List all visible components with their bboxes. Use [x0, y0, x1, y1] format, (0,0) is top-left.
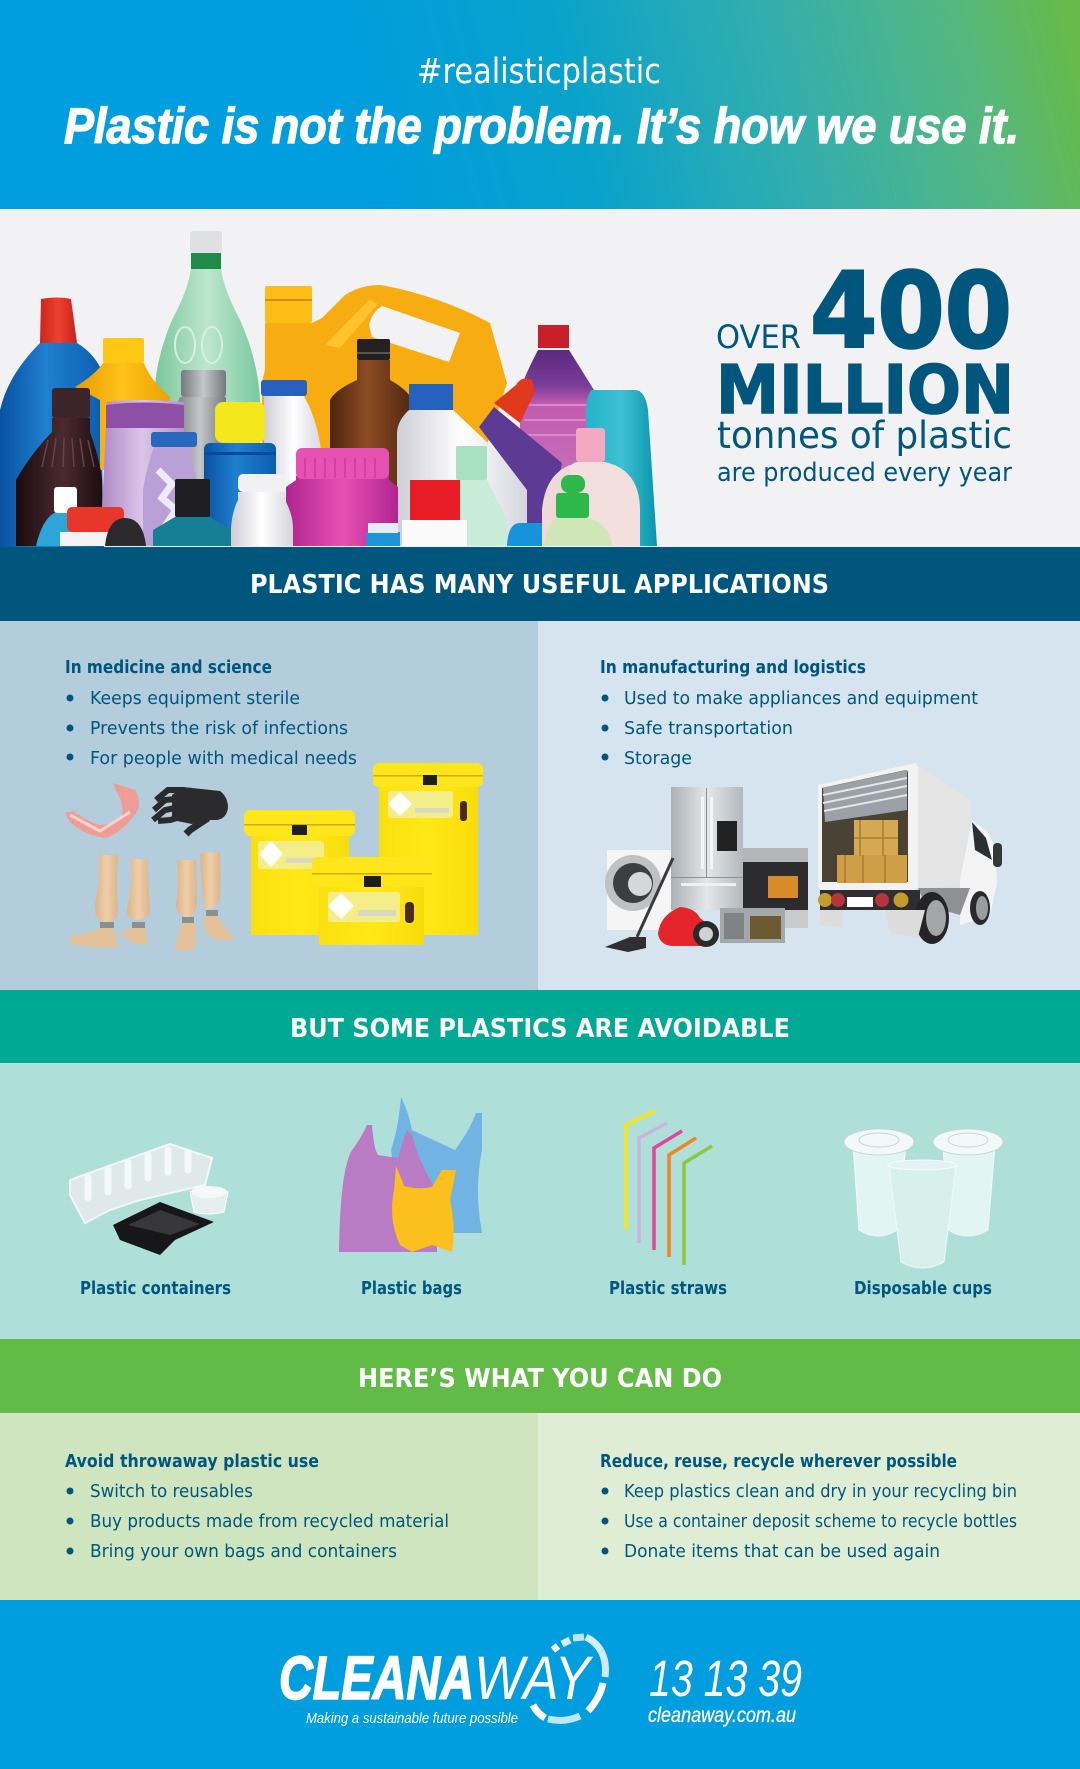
bullet list: Donate items that can be used again: [624, 1541, 940, 1562]
statistic: 400 million tonnes: [716, 250, 1014, 488]
contact: phone: 13 13 39: [649, 1650, 802, 1707]
item: disposable cups: [844, 1129, 1003, 1299]
bullet list: Use a container deposit scheme to recycle bottles: [624, 1511, 1017, 1532]
image: prosthetic legs: [70, 852, 234, 951]
bullet list: Keeps equipment sterile: [90, 688, 300, 709]
item: plastic bags: [339, 1097, 482, 1299]
image: plastic bottles: [0, 231, 657, 547]
label: Disposable cups: [854, 1278, 992, 1299]
panel: medicine and science: [0, 621, 538, 990]
image: denture: [65, 783, 139, 838]
logo: cleanaway: CLEANA: [279, 1644, 474, 1712]
image: appliances: [605, 787, 808, 952]
400: 400: [810, 250, 1012, 372]
image: delivery truck: [818, 763, 1002, 944]
heading: In manufacturing and logistics: [600, 657, 866, 678]
bullet list: For people with medical needs: [90, 748, 357, 769]
label: Plastic bags: [361, 1278, 462, 1299]
image: yellow sharps bins: [244, 763, 483, 945]
item: plastic containers: [70, 1144, 231, 1299]
label: Plastic containers: [80, 1278, 231, 1299]
bullet list: [66, 688, 357, 769]
bullet list: Switch to reusables: [90, 1481, 253, 1502]
heading: In medicine and science: [65, 657, 272, 678]
heading band: applications: PLASTIC HAS MANY USEFUL APPLICATIONS: [250, 570, 829, 600]
panel: avoidable plastics: [0, 1063, 1080, 1339]
bullet list: Buy products made from recycled material: [90, 1511, 449, 1532]
heading band: avoidable: BUT SOME PLASTICS ARE AVOIDABLE: [290, 1014, 790, 1044]
tonnes of plastic: tonnes of plastic: [717, 414, 1012, 457]
hashtag: #realisticplastic: [417, 52, 661, 92]
bullet list: Bring your own bags and containers: [90, 1541, 397, 1562]
image: prosthetic hand: [153, 787, 228, 834]
heading band: what you can do: [0, 1339, 1080, 1413]
item: plastic straws: [609, 1111, 727, 1299]
bullet list: [66, 1481, 449, 1562]
bullet list: Storage: [624, 748, 692, 769]
panel: avoid throwaway plastic: [0, 1413, 538, 1600]
heading: Avoid throwaway plastic use: [65, 1451, 319, 1472]
logo ring: [533, 1637, 606, 1720]
bullet list: [602, 1481, 1017, 1562]
panel: hero: [0, 209, 1080, 547]
footer: [0, 1600, 1080, 1769]
label: Plastic straws: [609, 1278, 727, 1299]
heading band: what you can do: HERE’S WHAT YOU CAN DO: [358, 1364, 722, 1394]
bullet list: Safe transportation: [624, 718, 793, 739]
are produced: are produced every year: [717, 458, 1012, 488]
panel: reduce reuse recycle: [538, 1413, 1080, 1600]
heading: Reduce, reuse, recycle wherever possible: [600, 1451, 957, 1472]
million: MILLION: [716, 351, 1014, 429]
contact: website: cleanaway.com.au: [648, 1704, 796, 1727]
panel: manufacturing and logistics: [538, 621, 1080, 990]
bullet list: Prevents the risk of infections: [90, 718, 348, 739]
logo: cleanaway: WAY: [474, 1644, 594, 1712]
bullet list: Keep plastics clean and dry in your recycling bin: [624, 1481, 1017, 1502]
bullet list: Used to make appliances and equipment: [624, 688, 978, 709]
heading band: avoidable: [0, 990, 1080, 1063]
heading band: applications: [0, 547, 1080, 621]
header banner: [0, 0, 1080, 209]
over: OVER: [716, 318, 801, 356]
logo: cleanaway: [279, 1637, 606, 1727]
tagline: Making a sustainable future possible: [306, 1710, 518, 1727]
bullet list: [602, 688, 978, 769]
